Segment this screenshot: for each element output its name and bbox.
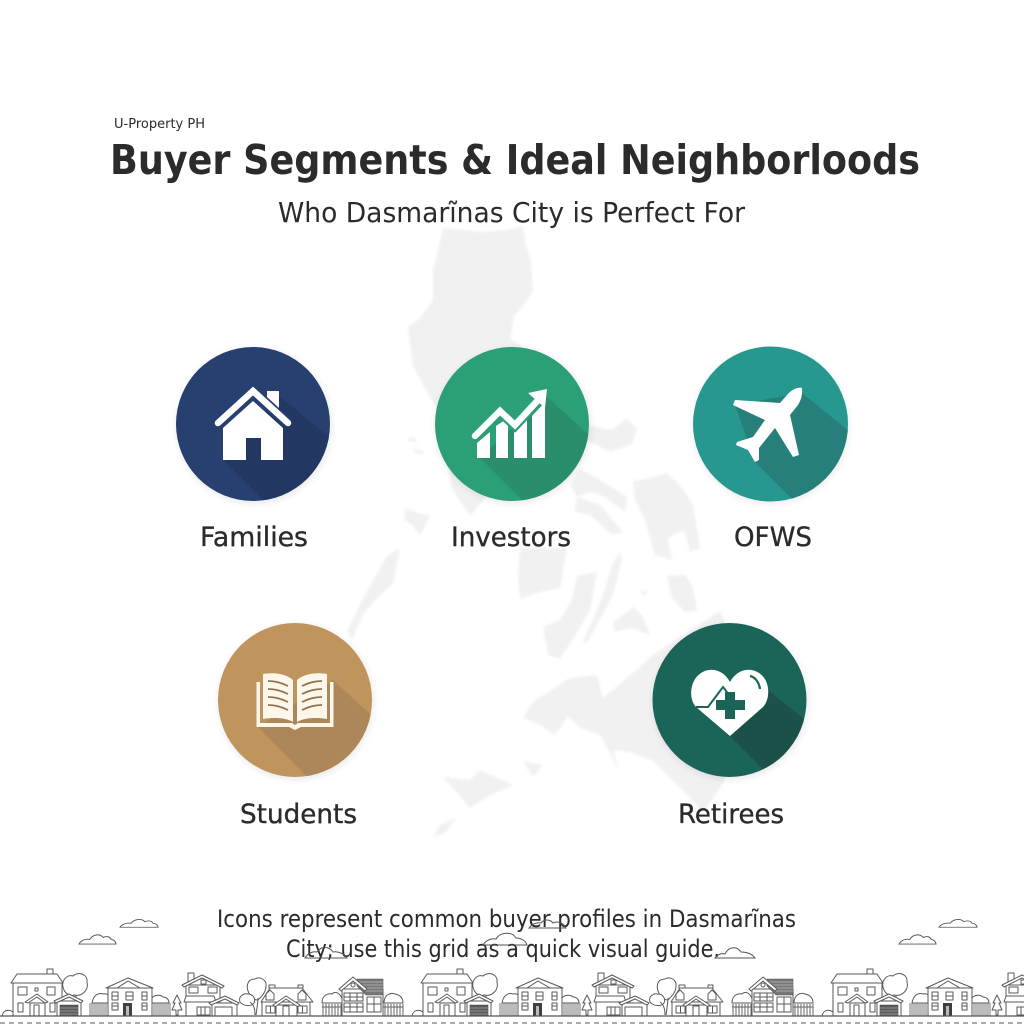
Bohol [613,607,650,635]
icon: house [218,391,288,460]
Sulu and small islands [443,770,513,808]
Samar and Leyte [633,473,700,560]
Panay [518,548,567,599]
icon: open book [256,673,334,730]
segment: Families [176,347,340,553]
Luzon [408,226,540,516]
title: Buyer Segments & Ideal Neighborloods [110,136,920,184]
segment: Students [218,623,385,830]
brand label: U-Property PH [114,117,205,132]
segment: Investors [435,347,600,553]
icon circle: tan [218,623,372,777]
Mindanao [523,611,740,813]
footer note [217,905,796,963]
icon circle: green [435,347,589,501]
label: Retirees: Retirees [678,799,784,830]
segment: OFWs [693,346,860,553]
icon circle: dark green [652,623,806,777]
Cebu [583,552,622,643]
label: Investors: Investors [451,522,571,553]
footer note: Icons represent common buyer profiles in Dasmarĩnas [217,905,796,933]
icon: heart with cross [691,670,768,736]
segment: Retirees [652,623,820,830]
Mindoro [404,508,430,536]
clouds overlapping the footer note [305,920,755,958]
label: Students: Students [240,799,357,830]
footer note: City; use this grid as a quick visual guide. [286,935,720,963]
house street illustration [0,969,1024,1023]
label: Families: Families [200,522,308,553]
label: OFWS: OFWS [734,522,812,553]
icon circle: navy [176,347,330,501]
Negros [543,572,597,659]
clouds [79,919,977,944]
Bicol and central islands [586,418,637,452]
Palawan [347,548,400,640]
watermark: Philippines map [347,226,740,837]
subtitle: Who Dasmarĩnas City is Perfect For [278,196,745,229]
icon: growth chart [475,389,547,458]
icon: airplane [733,388,802,462]
icon circle: teal [693,346,848,502]
